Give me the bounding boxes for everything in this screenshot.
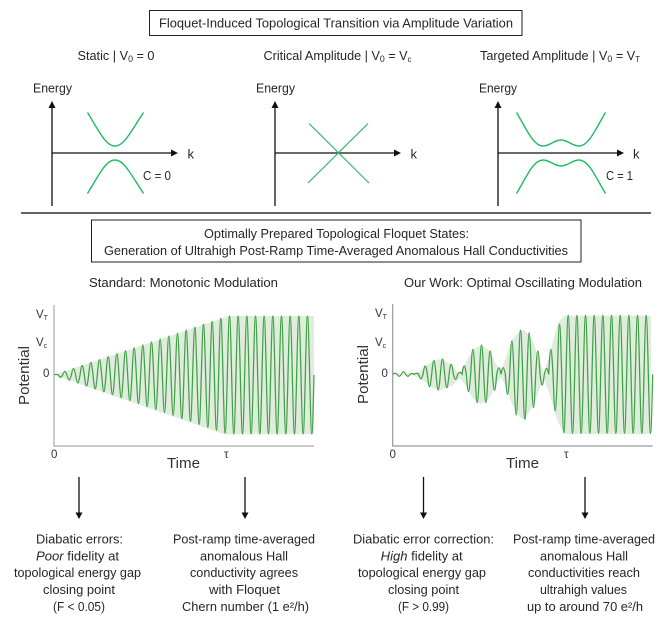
text block: ultrahigh conductivities: anomalous Hall: [540, 548, 628, 564]
y tick labels: [375, 308, 388, 380]
heading: static: = 0: [133, 48, 154, 63]
text block: standard post-ramp conductivity: with Floquet: [208, 582, 280, 597]
heading: targeted amplitude: 0: [607, 54, 612, 64]
title: Floquet-Induced Topological Transition via Amplitude Variation: [159, 16, 513, 30]
x axis label: Time: [506, 456, 539, 472]
text block: standard post-ramp conductivity: Chern number (1 e²/h): [182, 599, 309, 614]
y tick labels: V: [36, 309, 44, 321]
axes: [272, 101, 401, 206]
label: Chern number 1: C = 1: [606, 168, 633, 183]
text block: diabatic error correction: Diabatic error correction:: [353, 532, 494, 546]
text block: standard post-ramp conductivity: conductivity agrees: [190, 565, 298, 580]
heading: static: Static | V: [78, 48, 129, 63]
subtitle box: Optimally Prepared Topological Floquet States:: [204, 226, 469, 241]
text block: diabatic error correction: High fidelity at: [381, 548, 463, 564]
text block: standard post-ramp conductivity: [173, 532, 315, 614]
panel: targeted band diagram: [479, 48, 640, 206]
heading: critical amplitude: Critical Amplitude | V: [264, 48, 383, 63]
text block: ultrahigh conductivities: Post-ramp time-averaged: [513, 532, 655, 546]
y tick labels: c: [383, 343, 387, 350]
text block: ultrahigh conductivities: up to around 70 e²/h: [527, 599, 643, 614]
text block: ultrahigh conductivities: ultrahigh values: [540, 582, 627, 597]
text block: diabatic error correction: closing point: [388, 582, 459, 597]
x tick labels: τ: [564, 449, 569, 461]
text block: standard diabatic errors: topological energy gap: [14, 565, 141, 580]
subtitle box: [92, 220, 581, 262]
text block: ultrahigh conductivities: [513, 532, 655, 614]
y tick labels: 0: [43, 368, 49, 380]
text block: diabatic error correction: (F > 0.99): [398, 599, 449, 614]
text block: standard diabatic errors: [14, 532, 141, 614]
waveform: [54, 316, 314, 434]
x tick labels: τ: [224, 449, 229, 461]
x axis label: Time: [167, 456, 200, 472]
text block: diabatic error correction: [353, 532, 494, 614]
axes: [54, 305, 314, 446]
heading: critical amplitude: = V: [385, 48, 408, 63]
label: energy axis: Energy: [256, 80, 295, 96]
bands: [516, 112, 606, 194]
chart: monotonic modulation: [17, 305, 314, 472]
chart: oscillating modulation: [356, 304, 653, 472]
heading: critical amplitude: 0: [380, 54, 385, 64]
arrow: optimal ramp: [420, 477, 427, 519]
y tick labels: c: [44, 343, 48, 350]
heading: standard modulation: Standard: Monotonic Modulation: [89, 275, 278, 290]
panel: critical band diagram: [256, 48, 418, 206]
bands: [88, 112, 144, 194]
label: energy axis: Energy: [479, 80, 517, 96]
y tick labels: V: [375, 337, 383, 349]
envelope fill: [54, 316, 314, 434]
x tick labels: 0: [51, 449, 57, 461]
x tick labels: 0: [390, 449, 396, 461]
envelope fill: [393, 316, 651, 434]
panel: static band diagram: [33, 48, 194, 206]
y tick labels: T: [383, 314, 388, 321]
heading: critical amplitude: c: [408, 55, 412, 64]
subtitle box: Generation of Ultrahigh Post-Ramp Time-Averaged Anomalous Hall Conductivities: [104, 243, 568, 258]
arrow: standard ramp: [76, 477, 82, 519]
heading: targeted amplitude: T: [635, 55, 640, 64]
text block: standard diabatic errors: Diabatic errors:: [36, 532, 123, 546]
x tick labels: [390, 449, 569, 461]
axes: [393, 304, 653, 446]
text block: standard diabatic errors: Poor fidelity at: [36, 548, 119, 564]
label: k: k: [633, 146, 640, 162]
y tick labels: V: [36, 337, 44, 349]
label: k: k: [188, 146, 194, 162]
heading: targeted amplitude: = V: [612, 48, 636, 63]
y axis label: Potential: [17, 346, 33, 405]
text block: standard diabatic errors: closing point: [43, 582, 115, 597]
arrow: optimal post-ramp: [582, 477, 588, 519]
x tick labels: [51, 449, 229, 461]
heading: our work modulation: Our Work: Optimal Oscillating Modulation: [404, 275, 642, 290]
text block: ultrahigh conductivities: conductivities reach: [528, 565, 640, 580]
axes: [494, 101, 624, 206]
bands: [308, 124, 369, 183]
text block: standard diabatic errors: (F < 0.05): [53, 599, 105, 614]
y axis label: Potential: [356, 345, 372, 404]
label: energy axis: Energy: [33, 80, 72, 96]
y tick labels: [36, 309, 49, 380]
axes: [48, 101, 178, 206]
label: Chern number 0: C = 0: [143, 168, 171, 183]
heading: static: 0: [128, 54, 133, 64]
y tick labels: 0: [382, 368, 388, 380]
title: [150, 10, 522, 36]
text block: standard post-ramp conductivity: Post-ramp time-averaged: [173, 532, 315, 546]
text block: diabatic error correction: topological energy gap: [358, 565, 486, 580]
text block: standard post-ramp conductivity: anomalous Hall: [200, 548, 288, 564]
arrow: standard post-ramp: [242, 477, 248, 519]
waveform: [393, 315, 653, 433]
heading: targeted amplitude: Targeted Amplitude | V: [480, 48, 611, 63]
y tick labels: T: [44, 315, 49, 322]
y tick labels: V: [375, 308, 383, 320]
label: k: k: [410, 146, 418, 162]
